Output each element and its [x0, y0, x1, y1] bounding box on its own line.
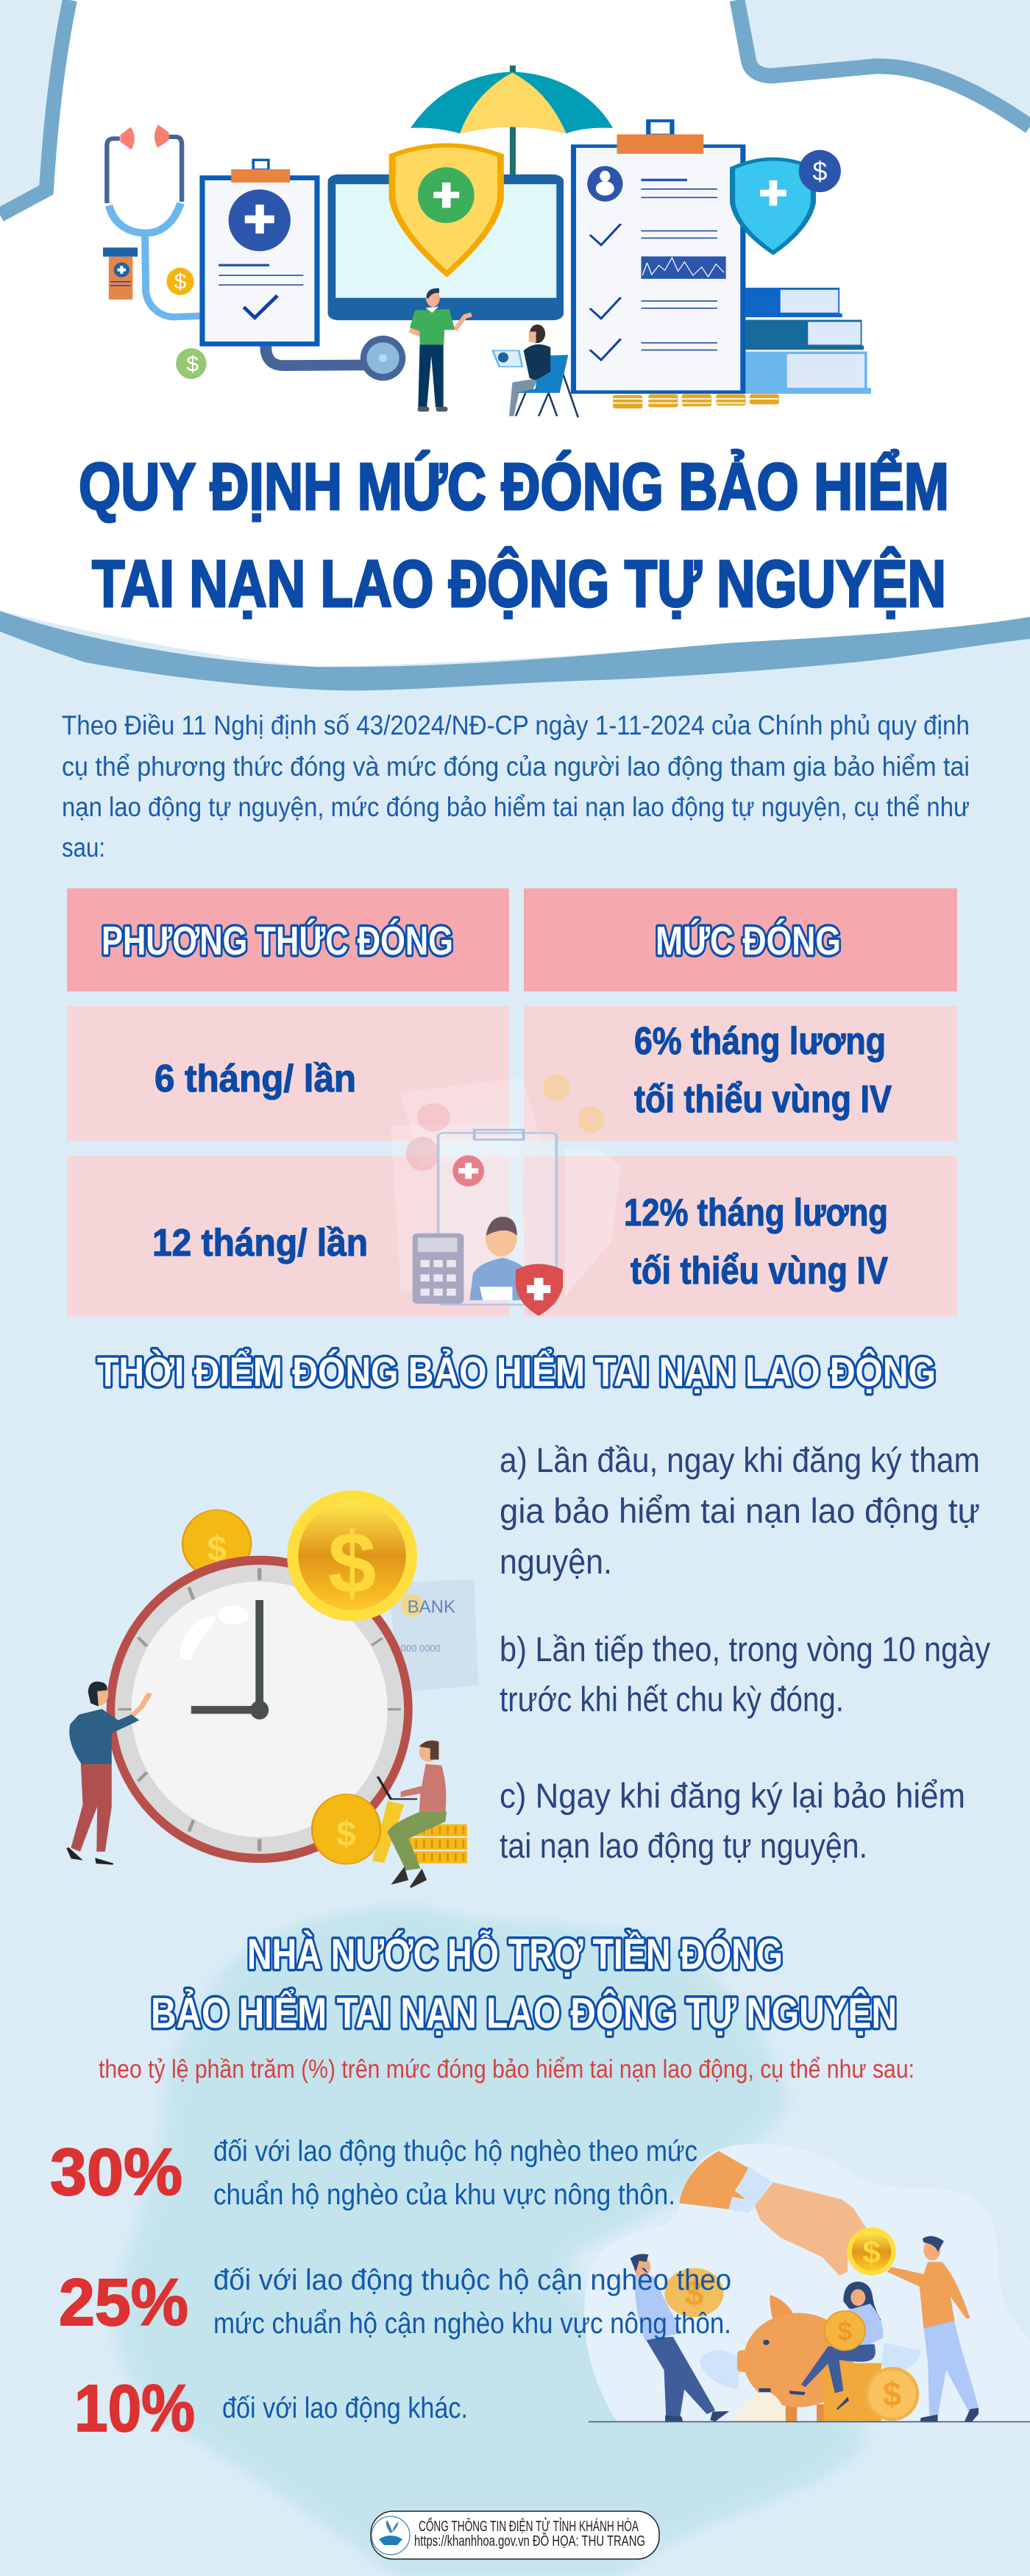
support rate 30%: chuẩn hộ nghèo của khu vực nông thôn. — [213, 2179, 675, 2211]
heading: state support: BẢO HIỂM TAI NẠN LAO ĐỘNG TỰ NGUYỆN — [151, 1989, 897, 2037]
table text: 12 tháng/ lần — [152, 1222, 368, 1264]
small coin behind clock: $ — [207, 1529, 227, 1568]
blue shield with dollar — [733, 150, 841, 252]
intro paragraph: sau: — [62, 832, 105, 863]
support rate 10%: đối với lao động khác. — [222, 2392, 468, 2424]
footer credit badge: https://khanhhoa.gov.vn ĐỒ HỌA: THU TRANG — [414, 2532, 645, 2550]
large dollar coin: $ — [328, 1515, 376, 1612]
timing list text: trước khi hết chu kỳ đóng. — [500, 1680, 844, 1719]
red subtitle: theo tỷ lệ phần trăm (%) trên mức đóng bảo hiểm tai nạn lao động, cụ thể như sau: — [99, 2055, 914, 2084]
illustration: insurance umbrella, monitor and shield — [328, 66, 613, 320]
hand dropping coin: $ — [862, 2234, 881, 2271]
checklist clipboard — [574, 121, 743, 392]
support rate 30%: đối với lao động thuộc hộ nghèo theo mức — [213, 2135, 697, 2168]
intro paragraph — [62, 710, 970, 863]
stack of books — [745, 288, 871, 394]
timing list text: tai nạn lao động tự nguyện. — [500, 1826, 867, 1865]
coin stack and lower coin: $ — [336, 1815, 356, 1854]
support rate 25%: mức chuẩn hộ cận nghèo khu vực nông thôn. — [213, 2307, 731, 2340]
clock — [107, 1556, 413, 1863]
heading: state support — [151, 1931, 897, 2037]
bank card — [388, 1579, 478, 1692]
timing list text: nguyện. — [500, 1542, 612, 1581]
man sitting on coins — [377, 1741, 447, 1887]
support rate 25%: 25% — [59, 2266, 188, 2340]
contribution table — [67, 888, 957, 1317]
man carrying coin — [631, 2254, 729, 2421]
blue shield with dollar: $ — [812, 156, 827, 186]
timing list text — [500, 1440, 990, 1865]
hand dropping coin — [679, 2151, 896, 2276]
medicine bottle — [103, 247, 138, 300]
support rate 10% — [74, 2372, 468, 2446]
bank card: 000 0000 — [401, 1643, 441, 1654]
footer credit badge: CỔNG THÔNG TIN ĐIỆN TỬ TỈNH KHÁNH HÒA — [419, 2517, 639, 2535]
table text: tối thiểu vùng IV — [631, 1250, 888, 1292]
woman holding coin: $ — [837, 2316, 852, 2346]
bank card: BANK — [408, 1597, 455, 1617]
watermark illustration: injured worker and clipboard — [391, 1074, 621, 1316]
table text: 6% tháng lương — [634, 1020, 886, 1063]
table text: 6 tháng/ lần — [154, 1058, 356, 1100]
large dollar coin — [287, 1490, 417, 1621]
illustration: seated woman, checklist, blue shield, books and coins — [493, 121, 871, 417]
timing list text: c) Ngay khi đăng ký lại bảo hiểm — [500, 1776, 965, 1815]
umbrella — [411, 66, 613, 180]
man carrying coin: $ — [685, 2274, 703, 2313]
clipboard with medical cross — [202, 160, 317, 344]
title — [79, 449, 949, 621]
table text — [102, 918, 892, 1292]
timing list text: gia bảo hiểm tai nạn lao động tự — [500, 1491, 980, 1530]
dollar coins: $ — [186, 352, 199, 376]
seated woman with laptop — [493, 325, 578, 417]
intro paragraph: cụ thể phương thức đóng và mức đóng của người lao động tham gia bảo hiểm tai — [62, 751, 970, 782]
support rate 30% — [50, 2135, 697, 2211]
yellow shield — [392, 145, 500, 274]
small coin behind clock — [182, 1510, 251, 1577]
logo — [372, 2516, 410, 2555]
watercolor background blob — [115, 1906, 867, 2576]
standing man — [410, 289, 472, 411]
timing list text: a) Lần đầu, ngay khi đăng ký tham — [500, 1440, 980, 1479]
top white header shape — [0, 0, 1030, 690]
man pointing at clock — [68, 1682, 150, 1864]
illustration: saving money piggy bank scene — [584, 2144, 1030, 2422]
man on right — [887, 2236, 979, 2421]
table text: tối thiểu vùng IV — [634, 1078, 892, 1121]
pale blob backdrop — [584, 2144, 1030, 2421]
support rate 25%: đối với lao động thuộc hộ cận nghèo theo — [213, 2264, 731, 2296]
support rate 30%: 30% — [50, 2136, 182, 2209]
footer credit badge — [371, 2511, 659, 2559]
table text: MỨC ĐÓNG — [656, 918, 841, 963]
woman holding coin — [789, 2282, 883, 2410]
table text: PHƯƠNG THỨC ĐÓNG — [102, 918, 453, 963]
support rate 25% — [59, 2264, 731, 2340]
illustration: clock, coins and people — [68, 1490, 478, 1887]
dollar coins: $ — [174, 270, 187, 294]
ground line — [589, 2421, 1030, 2422]
table text: 12% tháng lương — [624, 1192, 888, 1234]
illustration: stethoscope, clipboard, coins and man — [103, 124, 472, 411]
gold coin stacks — [613, 394, 779, 408]
heading: state support: NHÀ NƯỚC HỖ TRỢ TIỀN ĐÓNG — [247, 1931, 783, 1978]
table cell backgrounds — [67, 888, 957, 1317]
piggy bank and coins — [700, 2295, 921, 2421]
monitor — [328, 174, 564, 320]
piggy bank and coins: $ — [883, 2375, 901, 2413]
dollar coins — [166, 268, 207, 379]
coin stack and lower coin — [312, 1794, 467, 1864]
stethoscope — [107, 124, 405, 381]
support rate 10%: 10% — [74, 2372, 195, 2446]
